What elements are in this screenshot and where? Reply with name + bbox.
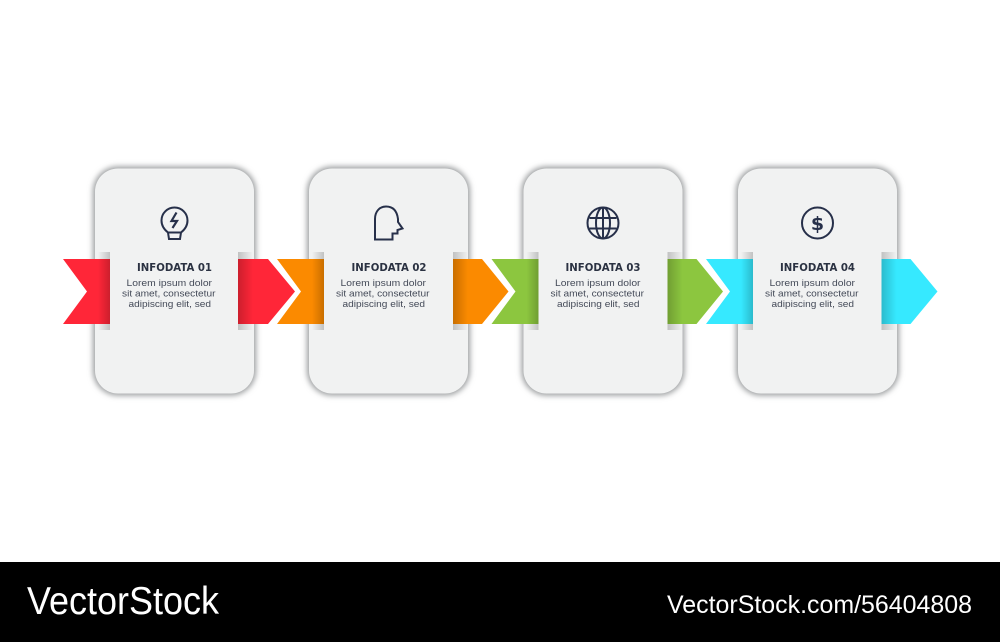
- ribbon 1 left: [63, 259, 110, 324]
- text block 3: adipiscing elit, sed: [557, 298, 640, 309]
- text block 4: [765, 277, 858, 309]
- slit shade 3 right: [668, 252, 682, 330]
- text block 3: [550, 277, 644, 309]
- icon: dollar coin: [802, 208, 833, 238]
- slit shade 1 right: [238, 252, 253, 330]
- text block 2: sit amet, consectetur: [336, 288, 430, 298]
- card group 1: red: [63, 166, 295, 396]
- ribbon 4 left: [706, 259, 753, 324]
- heading 3: INFODATA 03: [566, 261, 640, 274]
- text block 2: Lorem ipsum dolor: [340, 277, 426, 288]
- text block 4: adipiscing elit, sed: [772, 298, 854, 309]
- card group 3: green: [492, 166, 723, 396]
- card 2 panel: [309, 168, 468, 394]
- text block 1: sit amet, consectetur: [122, 288, 216, 298]
- card 3 panel: [524, 168, 682, 394]
- ribbon 3 left: [492, 259, 538, 324]
- text block 1: [122, 277, 216, 309]
- card 4 panel: [738, 168, 897, 394]
- card 1 panel: [95, 168, 254, 394]
- slit shade 4 left: [741, 252, 753, 330]
- card 2 shadow: [307, 166, 470, 396]
- text block 1: adipiscing elit, sed: [128, 298, 211, 309]
- text block 2: adipiscing elit, sed: [342, 298, 425, 309]
- footer url text: VectorStock.com/56404808: [667, 591, 972, 619]
- text block 4: sit amet, consectetur: [765, 288, 858, 298]
- heading 2: INFODATA 02: [352, 261, 426, 274]
- heading 4: INFODATA 04: [780, 261, 855, 274]
- slit shade 3 left: [526, 252, 538, 330]
- ribbon 3 right arrow: [668, 259, 723, 324]
- heading 1: INFODATA 01: [137, 261, 212, 274]
- slit shade 4 right: [882, 252, 896, 330]
- ribbon 4 right arrow: [882, 259, 938, 324]
- text block 4: Lorem ipsum dolor: [770, 277, 855, 288]
- slit shade 2 right: [453, 252, 468, 330]
- icon: light bulb: [162, 208, 188, 239]
- ribbon 1 right arrow: [238, 259, 295, 324]
- icon: head profile: [375, 206, 402, 240]
- footer bar: [0, 562, 1000, 642]
- card group 2: orange: [277, 166, 508, 396]
- text block 2: [336, 277, 430, 309]
- footer logo text: VectorStock: [27, 580, 219, 623]
- slit shade 2 left: [312, 252, 324, 330]
- text block 3: sit amet, consectetur: [550, 288, 644, 298]
- icon: dollar coin: $: [811, 213, 824, 235]
- ribbon 2 right arrow: [453, 259, 508, 324]
- text block 1: Lorem ipsum dolor: [126, 277, 212, 288]
- card group 4: cyan: [706, 166, 938, 396]
- text block 3: Lorem ipsum dolor: [555, 277, 640, 288]
- card 1 shadow: [93, 166, 256, 396]
- card 3 shadow: [522, 166, 684, 396]
- slit shade 1 left: [98, 252, 110, 330]
- card 4 shadow: [736, 166, 899, 396]
- icon: globe: [588, 208, 618, 238]
- ribbon 2 left: [277, 259, 324, 324]
